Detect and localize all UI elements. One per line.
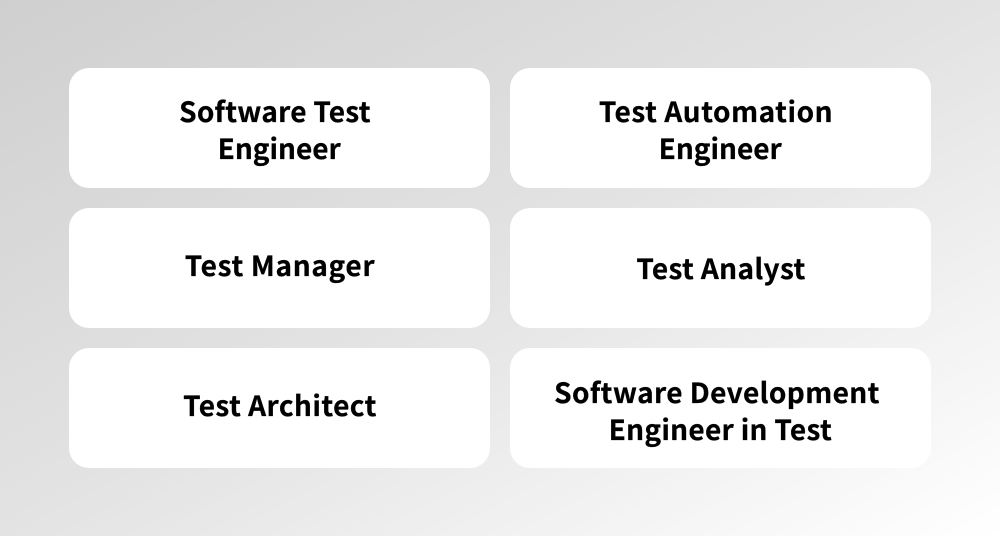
- card: Test Architect: [69, 348, 490, 468]
- label: Software Test Engineer: Software Test: [179, 91, 371, 131]
- label: Software Development Engineer in Test: [554, 372, 880, 449]
- label: Test Automation Engineer: Test Automation: [599, 91, 833, 131]
- label: Test Manager: Test Manager: [185, 245, 375, 285]
- card: Test Manager: [69, 208, 490, 328]
- card: Software Test Engineer: [69, 68, 490, 188]
- label: Software Test Engineer: Engineer: [218, 128, 341, 168]
- label: Software Development Engineer in Test: Software Development: [554, 372, 880, 412]
- label: Software Test Engineer: [179, 91, 371, 168]
- label: Test Analyst: Test Analyst: [636, 248, 806, 288]
- card: Test Automation Engineer: [510, 68, 931, 188]
- label: Test Automation Engineer: Engineer: [659, 128, 782, 168]
- label: Software Development Engineer in Test: Engineer in Test: [609, 409, 832, 449]
- label: Test Architect: Test Architect: [183, 385, 377, 425]
- card: Software Development Engineer in Test: [510, 348, 931, 468]
- card: Test Analyst: [510, 208, 931, 328]
- label: Test Automation Engineer: [599, 91, 833, 168]
